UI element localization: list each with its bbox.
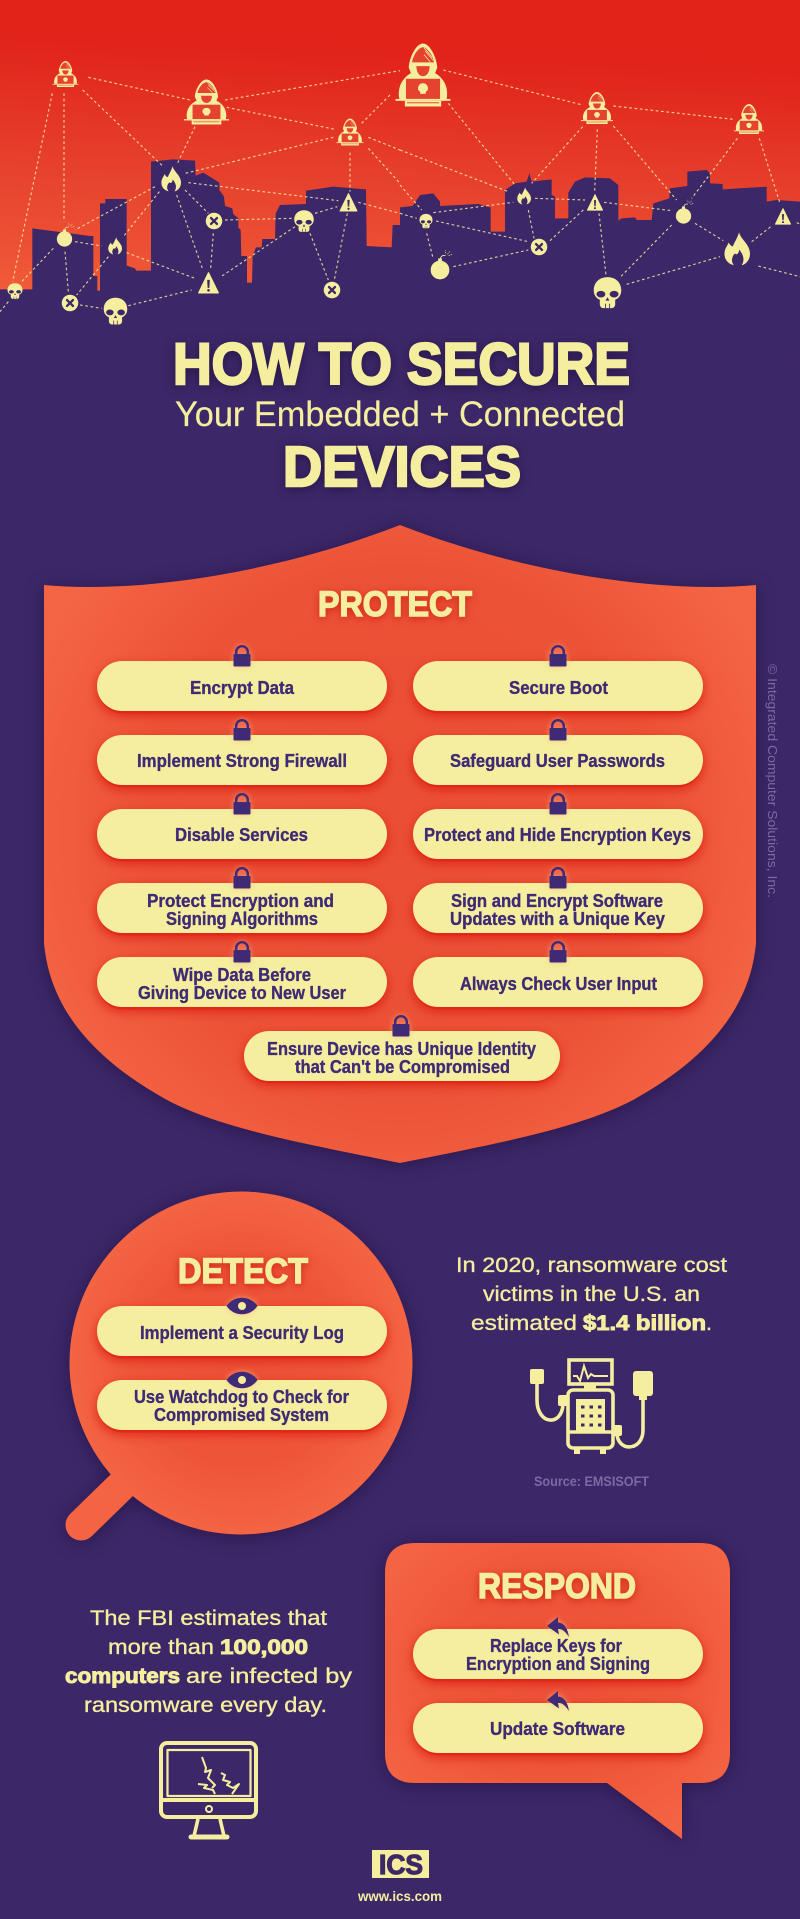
icon: flame 3 xyxy=(517,187,531,204)
item: strong firewall: Implement Strong Firewall xyxy=(137,751,347,771)
item: wipe data: Giving Device to New User xyxy=(138,983,346,1003)
icon: warning 2 xyxy=(340,194,357,211)
text: FBI estimate stat: 100,000 xyxy=(220,1635,308,1659)
icon: hacker large xyxy=(396,44,450,106)
item: encrypt data: Encrypt Data xyxy=(190,678,295,698)
item: watchdog: Compromised System xyxy=(154,1405,329,1425)
title: HOW TO SECURE xyxy=(173,332,630,397)
item: unique identity: that Can't be Compromised xyxy=(295,1057,510,1077)
text: FBI estimate stat xyxy=(65,1606,352,1717)
icon: warning 4 xyxy=(775,209,791,224)
item: secure boot: Secure Boot xyxy=(509,678,608,698)
item: update software: Update Software xyxy=(490,1719,625,1739)
item: hide encryption keys xyxy=(412,794,704,864)
icon: skull 3 xyxy=(294,210,314,232)
item: wipe data: Wipe Data Before xyxy=(173,965,311,985)
hero: city skyline xyxy=(0,159,800,367)
item: check user input xyxy=(412,942,704,1012)
icon: hacker 2 xyxy=(184,80,229,124)
item: strong firewall xyxy=(96,720,388,790)
icon: hacker 3 xyxy=(336,118,364,146)
item: disable services xyxy=(96,794,388,864)
icon: cracked monitor xyxy=(160,1743,257,1837)
item: unique identity xyxy=(243,1016,561,1086)
text: ransomware cost stat: victims in the U.S. an xyxy=(483,1282,700,1306)
item: sign updates: Sign and Encrypt Software xyxy=(451,891,663,911)
text: FBI estimate stat: are infected by xyxy=(186,1664,352,1688)
icon: bomb 3 xyxy=(676,200,694,224)
item: protect algorithms xyxy=(96,868,388,938)
item: wipe data xyxy=(96,942,388,1012)
logo: ICS: ICS xyxy=(379,1849,423,1880)
title: Your Embedded + Connected xyxy=(175,395,625,434)
item: secure boot xyxy=(412,646,704,716)
heading: protect: PROTECT xyxy=(318,585,472,624)
title: DEVICES xyxy=(283,435,521,499)
panel: protect shield xyxy=(44,525,756,1165)
icon: flame 4 xyxy=(724,232,750,265)
icon: warning 1 xyxy=(199,273,218,293)
website url: www.ics.com xyxy=(357,1889,442,1904)
heading: detect: DETECT xyxy=(178,1252,308,1291)
text: ransomware cost stat: . xyxy=(706,1311,712,1335)
hero: dashed network lines xyxy=(0,70,800,312)
icon: hacker 1 xyxy=(52,61,78,87)
icon: bomb 2 xyxy=(431,250,452,279)
item: watchdog: Use Watchdog to Check for xyxy=(134,1387,349,1407)
item: encrypt data xyxy=(96,646,388,716)
copyright note: © Integrated Computer Solutions, Inc. xyxy=(765,664,780,898)
icon: skull 1 xyxy=(7,283,22,299)
text: ransomware cost stat xyxy=(456,1253,727,1335)
item: replace keys: Replace Keys for xyxy=(490,1636,622,1656)
item: sign updates xyxy=(412,868,704,938)
item: security log xyxy=(96,1298,388,1361)
item: sign updates: Updates with a Unique Key xyxy=(450,909,665,929)
text: FBI estimate stat: The FBI estimates that xyxy=(90,1606,327,1630)
text: FBI estimate stat: ransomware every day. xyxy=(84,1693,327,1717)
panel: respond speech bubble xyxy=(385,1543,730,1841)
item: disable services: Disable Services xyxy=(175,825,308,845)
text: ransomware cost stat: In 2020, ransomware cost xyxy=(456,1253,727,1277)
item: protect algorithms: Signing Algorithms xyxy=(166,909,318,929)
icon: medical device xyxy=(530,1360,653,1454)
icon: x mark 2 xyxy=(206,213,222,229)
source note: Source: EMSISOFT xyxy=(534,1474,650,1489)
icon: skull 2 xyxy=(104,298,127,324)
hero: sky gradient xyxy=(0,0,800,350)
icon: x mark 4 xyxy=(531,239,547,255)
item: safeguard passwords: Safeguard User Passwords xyxy=(450,751,665,771)
item: safeguard passwords xyxy=(412,720,704,790)
item: protect algorithms: Protect Encryption and xyxy=(147,891,334,911)
item: replace keys xyxy=(412,1617,704,1684)
icon: skull 5 xyxy=(594,277,621,308)
text: FBI estimate stat: more than xyxy=(108,1635,214,1659)
text: FBI estimate stat: computers xyxy=(65,1664,180,1688)
icon: warning 3 xyxy=(587,195,603,210)
item: check user input: Always Check User Input xyxy=(460,974,657,994)
icon: x mark 1 xyxy=(62,295,78,311)
item: replace keys: Encryption and Signing xyxy=(466,1654,650,1674)
icon: flame 2 xyxy=(108,237,122,254)
text: ransomware cost stat: $1.4 billion xyxy=(583,1311,706,1335)
item: unique identity: Ensure Device has Unique Identity xyxy=(267,1039,536,1059)
text: ransomware cost stat: estimated xyxy=(471,1311,577,1335)
item: watchdog xyxy=(96,1372,388,1435)
title xyxy=(173,332,630,499)
icon: flame 1 xyxy=(161,166,181,191)
item: security log: Implement a Security Log xyxy=(140,1323,344,1343)
icon: skull 4 xyxy=(420,214,432,228)
heading: respond: RESPOND xyxy=(478,1567,636,1606)
icon: x mark 3 xyxy=(324,282,340,298)
panel: detect magnifier xyxy=(70,1192,412,1536)
item: update software xyxy=(412,1691,704,1758)
icon: hacker 5 xyxy=(581,92,613,124)
icon: hacker 6 xyxy=(734,104,764,134)
icon: bomb 1 xyxy=(57,223,75,247)
item: hide encryption keys: Protect and Hide Encryption Keys xyxy=(424,825,691,845)
